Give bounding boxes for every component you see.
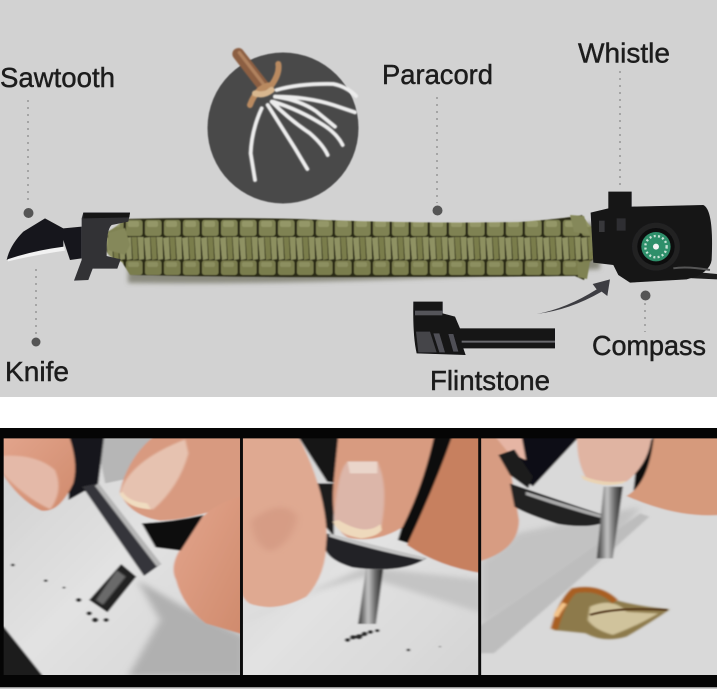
label: Sawtooth: Sawtooth bbox=[0, 62, 115, 93]
label: Knife: Knife bbox=[5, 356, 69, 387]
icon: whistle holes bbox=[599, 218, 626, 232]
label: Paracord: Paracord bbox=[382, 59, 493, 90]
label: Compass: Compass bbox=[592, 330, 706, 361]
spark debris bbox=[345, 629, 441, 651]
photo 2: pressing blade on rod bbox=[240, 435, 482, 678]
icon: knife and sawtooth clasp bbox=[7, 213, 130, 281]
panel dividers bbox=[240, 438, 481, 675]
inset: paracord inner strands bbox=[208, 52, 358, 204]
icon: compass dial bbox=[632, 223, 680, 271]
photo 3: paper catching fire bbox=[478, 435, 717, 678]
spark debris bbox=[11, 564, 109, 622]
burn mark bbox=[553, 589, 670, 639]
arrow: flintstone to buckle bbox=[537, 279, 610, 314]
icon: flintstone bbox=[413, 302, 555, 355]
label: Paracord bbox=[382, 59, 493, 216]
icon: compass and whistle buckle bbox=[591, 192, 717, 283]
label: Knife bbox=[5, 269, 69, 387]
label: Whistle: Whistle bbox=[578, 38, 670, 68]
label: Flintstone: Flintstone bbox=[430, 365, 550, 396]
bracelet band bbox=[106, 215, 606, 283]
photo 1: scraping flint bbox=[0, 435, 245, 678]
panel: bracelet diagram bbox=[0, 0, 717, 397]
panel: fire-starting photo strip bbox=[0, 428, 717, 688]
photo frame bbox=[0, 428, 717, 688]
label: Sawtooth bbox=[0, 62, 115, 218]
label: Compass bbox=[592, 290, 706, 361]
